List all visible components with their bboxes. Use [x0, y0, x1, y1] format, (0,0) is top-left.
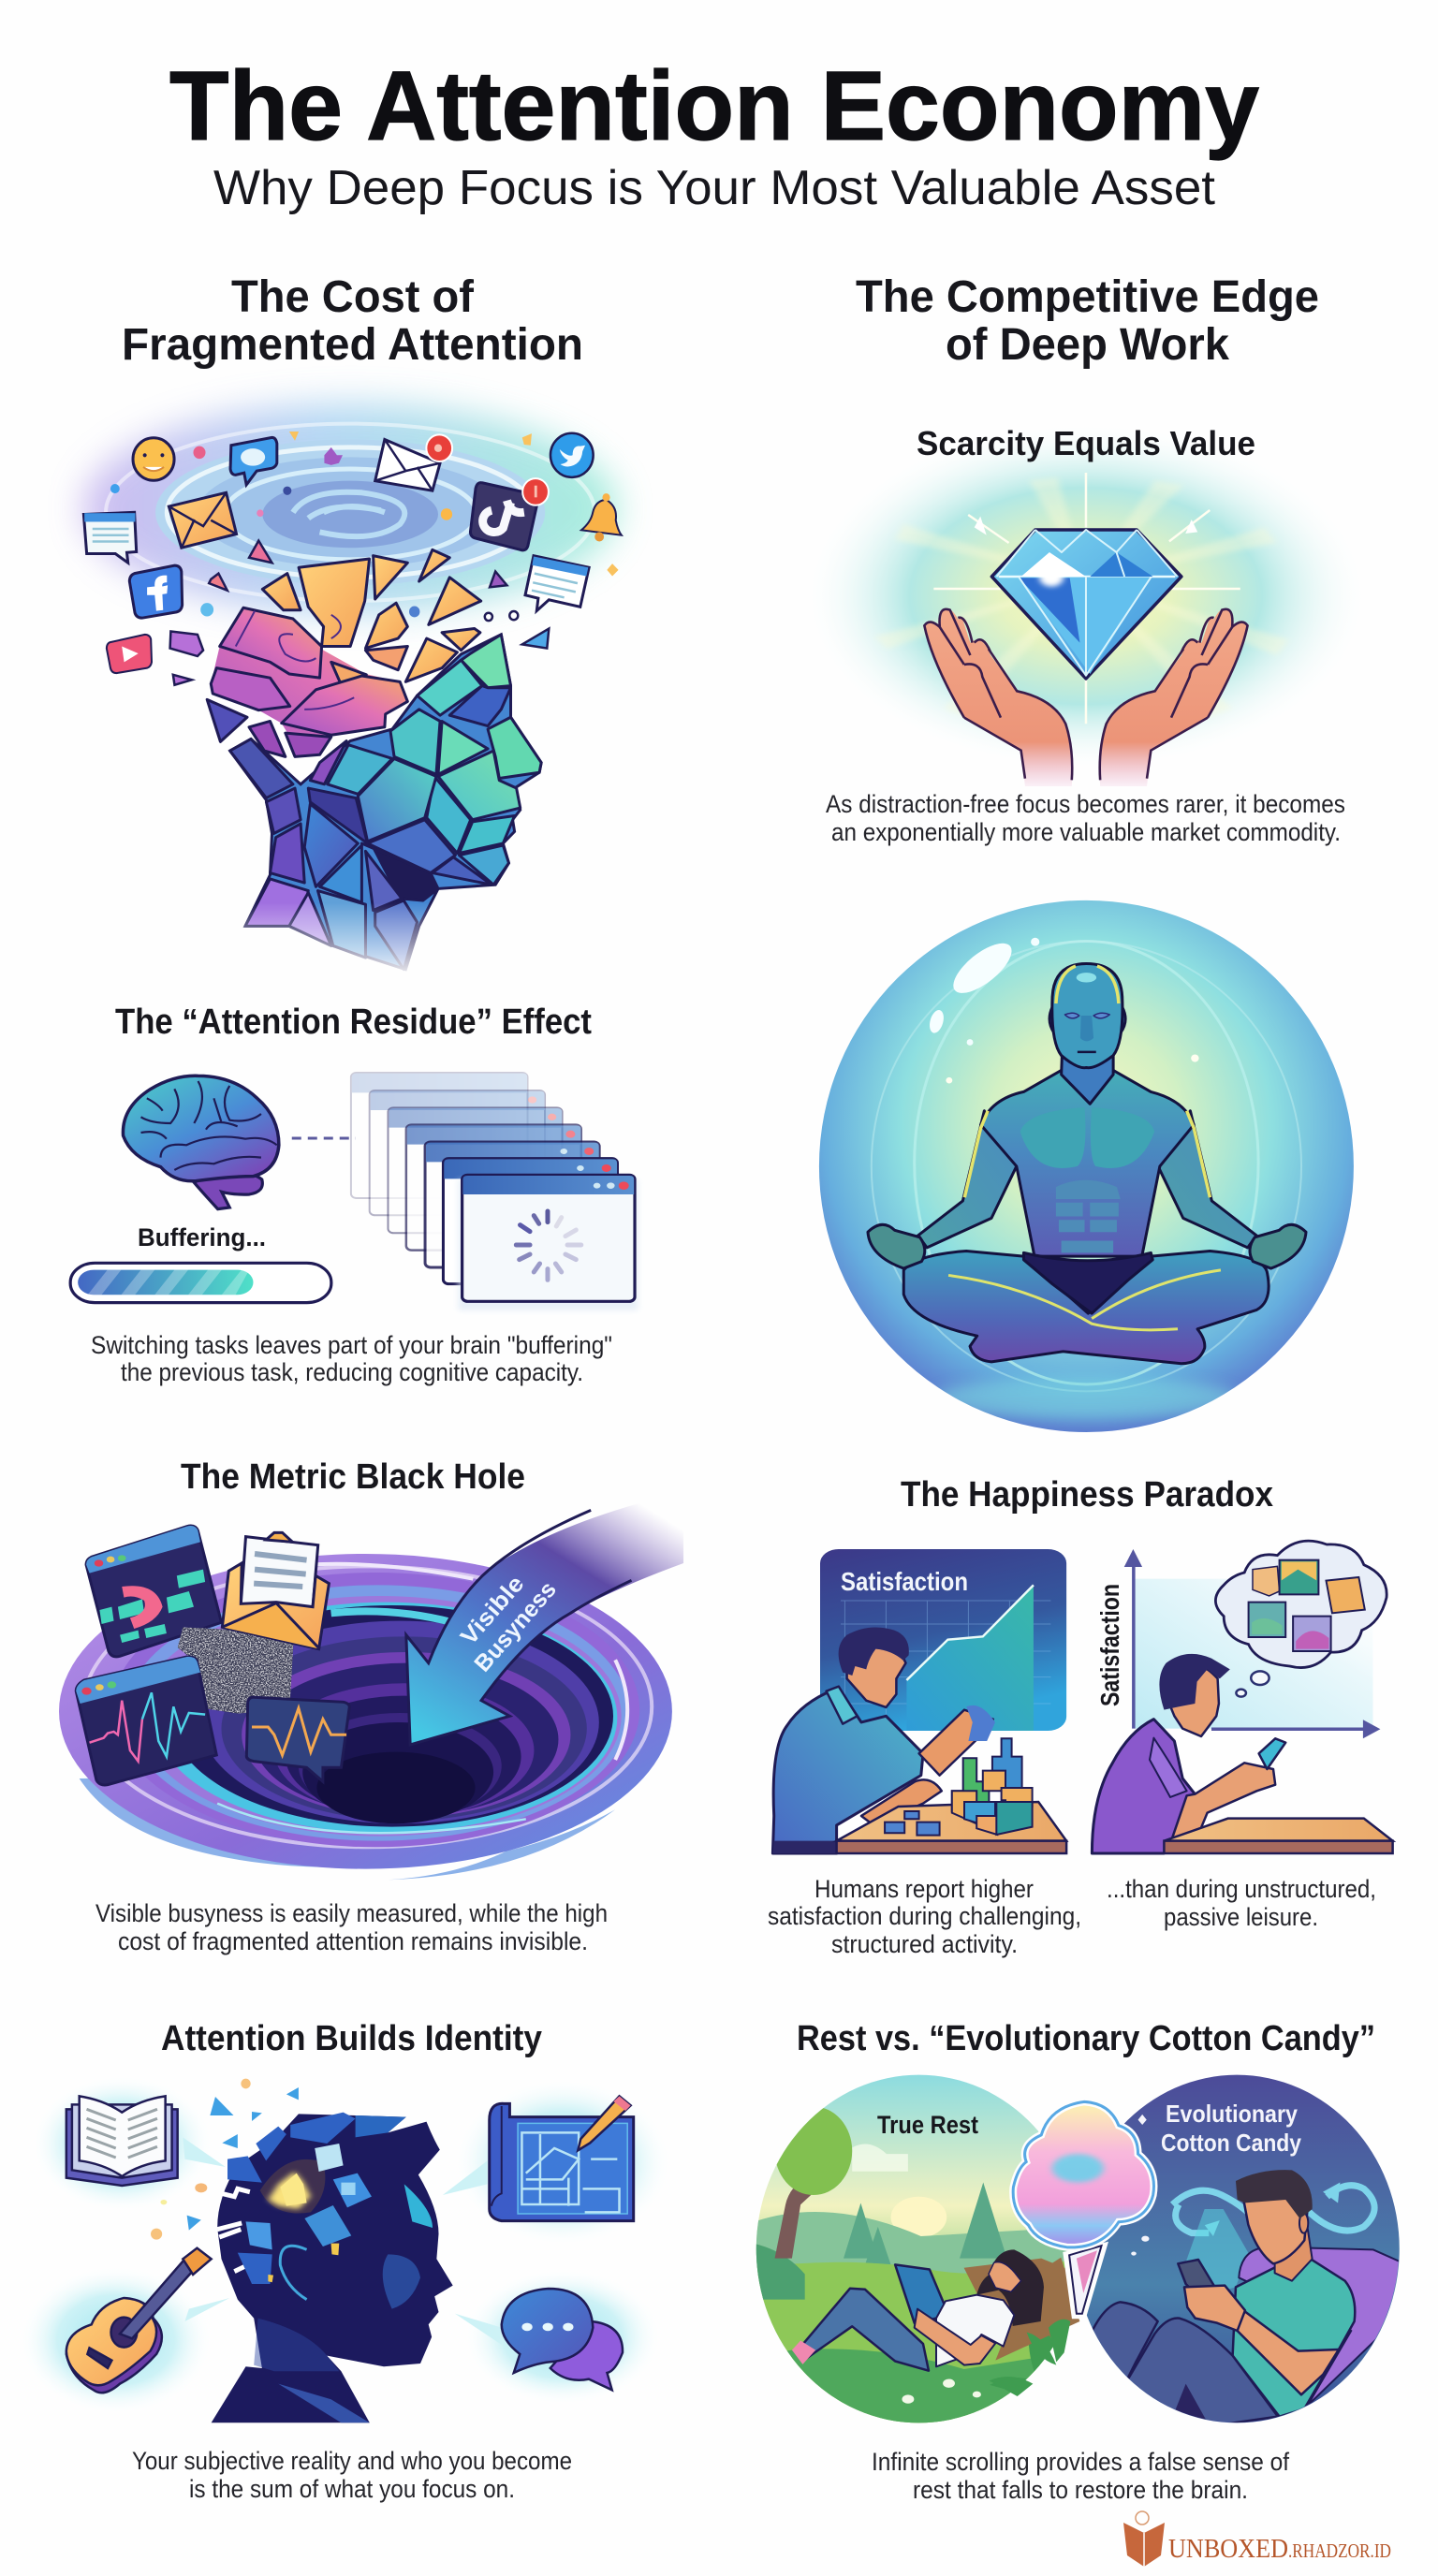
- icon: smiley: [133, 438, 174, 480]
- subtitle: Why Deep Focus is Your Most Valuable Asset: [213, 161, 1216, 215]
- text: black hole caption: [95, 1899, 608, 1955]
- chat waveform: [246, 1697, 349, 1781]
- label: chart satisfaction: Satisfaction: [841, 1567, 968, 1596]
- panel: black hole illustration: [59, 1491, 683, 1880]
- icon: message window right: [525, 556, 589, 611]
- icon: social f badge: [129, 565, 183, 618]
- icon: message window left: [83, 512, 137, 563]
- brain shards: [207, 549, 481, 784]
- ears: [1049, 1007, 1125, 1033]
- heading: right column: [856, 272, 1319, 370]
- icon: bird badge: [550, 433, 594, 477]
- text: rest caption: [872, 2448, 1289, 2504]
- icon: white envelope with badge: [375, 434, 452, 490]
- vortex: [59, 1554, 672, 1880]
- watermark logo: UNBOXED: [1168, 2535, 1288, 2564]
- table and blocks: [837, 1738, 1066, 1853]
- label: evolutionary cotton candy: Evolutionary: [1166, 2100, 1298, 2128]
- legs: [903, 1251, 1269, 1364]
- text: structured caption: [768, 1875, 1081, 1958]
- panel: identity illustration: [19, 2075, 672, 2422]
- scene: true rest: [749, 2071, 1089, 2426]
- icon: guitar: [66, 2248, 212, 2393]
- text: structured caption: satisfaction during challenging,: [768, 1902, 1081, 1930]
- text: black hole caption: Visible busyness is easily measured, while the high: [95, 1899, 608, 1927]
- heading: right column: The Competitive Edge: [856, 272, 1319, 322]
- text: structured caption: structured activity.: [831, 1930, 1018, 1958]
- neck: [1062, 1028, 1113, 1104]
- icon: left hand: [924, 609, 1072, 786]
- torso: [981, 1069, 1194, 1256]
- panel: fragmented head illustration: [83, 404, 622, 981]
- label: axis satisfaction: Satisfaction: [1095, 1584, 1124, 1706]
- icon: brain: [123, 1076, 279, 1209]
- label: visible busyness: Visible: [456, 1571, 529, 1650]
- heading: metric black hole: The Metric Black Hole: [181, 1457, 525, 1497]
- progress bar: [70, 1263, 331, 1303]
- heading: left column: The Cost of: [231, 272, 475, 322]
- panel: diamond illustration: [801, 421, 1371, 786]
- text: rest caption: rest that falls to restore the brain.: [913, 2476, 1248, 2504]
- dashed connector: [292, 1136, 356, 1139]
- icon: open book: [66, 2096, 178, 2186]
- hands: [868, 1224, 925, 1268]
- geometric face: [230, 635, 541, 970]
- satisfaction chart panel: [820, 1549, 1066, 1731]
- brain backing: [211, 607, 407, 754]
- icon: open envelope: [222, 1532, 329, 1649]
- icon: right hand: [1100, 609, 1248, 786]
- text: structured caption: Humans report higher: [814, 1875, 1034, 1903]
- heading: attention residue: The “Attention Residue” Effect: [115, 1003, 592, 1042]
- table right: [1164, 1819, 1393, 1853]
- head silhouette backing: [230, 635, 541, 970]
- glows: [19, 2075, 672, 2415]
- panel: attention residue illustration: [70, 1073, 638, 1310]
- right arm: [1158, 1111, 1256, 1248]
- man with phone and cushion: [1086, 2170, 1401, 2427]
- text: rest caption: Infinite scrolling provides a false sense of: [872, 2448, 1289, 2476]
- text: passive caption: passive leisure.: [1164, 1903, 1318, 1931]
- text: scarcity caption: [826, 790, 1345, 846]
- label: evolutionary cotton candy: Cotton Candy: [1161, 2129, 1301, 2157]
- label: visible busyness: Busyness: [469, 1576, 562, 1677]
- icon: chat bubble: [230, 437, 277, 485]
- stacked windows: [351, 1073, 638, 1310]
- watermark logo: [1123, 2511, 1391, 2567]
- text: identity caption: Your subjective reality and who you become: [132, 2447, 572, 2475]
- icon: cotton candy: [1013, 2101, 1153, 2317]
- man building blocks: [772, 1627, 995, 1853]
- heading: attention builds identity: Attention Builds Identity: [161, 2019, 542, 2058]
- icon: blueprint and pencil: [490, 2096, 634, 2221]
- heading: scarcity equals value: Scarcity Equals Value: [917, 424, 1255, 462]
- icon: bell: [581, 493, 622, 542]
- face: [1052, 964, 1123, 1068]
- heading: left column: Fragmented Attention: [122, 320, 583, 370]
- scene: evolutionary cotton candy: [1074, 2071, 1404, 2426]
- label: visible busyness: [448, 1558, 562, 1677]
- muscles: [1020, 1107, 1154, 1168]
- text: identity caption: [132, 2447, 572, 2503]
- icon: chat bubbles: [502, 2289, 623, 2390]
- watermark logo: .RHADZOR.ID: [1288, 2539, 1391, 2562]
- text: scarcity caption: an exponentially more valuable market commodity.: [831, 818, 1341, 846]
- heading: happiness paradox: The Happiness Paradox: [901, 1475, 1273, 1515]
- bubble: [819, 900, 1354, 1432]
- title: The Attention Economy: [169, 51, 1259, 161]
- sparkles: [1131, 2115, 1150, 2256]
- shards and light: [151, 2079, 372, 2284]
- thought cloud: [1215, 1541, 1387, 1697]
- text: scarcity caption: As distraction-free focus becomes rarer, it becomes: [826, 790, 1345, 818]
- text: attention residue caption: Switching tasks leaves part of your brain "buffering": [91, 1331, 612, 1359]
- card: dashboard: [86, 1526, 221, 1657]
- loading spinner: [516, 1211, 581, 1280]
- text: attention residue caption: the previous task, reducing cognitive capacity.: [121, 1358, 583, 1386]
- woman legs and book: [792, 2264, 949, 2371]
- floating fragments: [170, 541, 549, 685]
- left arm: [918, 1111, 1017, 1248]
- text: black hole caption: cost of fragmented attention remains invisible.: [118, 1927, 588, 1955]
- panel: rest vs cotton candy illustration: [749, 2071, 1404, 2427]
- arrow: visible busyness: [406, 1491, 683, 1745]
- icon: music app: [470, 478, 549, 550]
- man with phone: [1092, 1654, 1285, 1853]
- heading: rest vs cotton candy: Rest vs. “Evolutionary Cotton Candy”: [797, 2019, 1375, 2058]
- text: attention residue caption: [91, 1331, 612, 1386]
- text: identity caption: is the sum of what you focus on.: [189, 2475, 515, 2503]
- heading: left column: [122, 272, 583, 370]
- panel: happiness paradox illustration: [772, 1541, 1393, 1853]
- label: true rest: True Rest: [877, 2111, 978, 2139]
- text: passive caption: [1107, 1875, 1376, 1931]
- panel: meditating figure in bubble: [819, 900, 1354, 1432]
- icon: play badge: [107, 635, 152, 673]
- woman upper body: [915, 2249, 1079, 2396]
- card: noise: [178, 1627, 294, 1714]
- figure: [868, 964, 1306, 1364]
- icon: diamond: [991, 530, 1181, 679]
- text: passive caption: ...than during unstructured,: [1107, 1875, 1376, 1903]
- label: buffering: Buffering...: [138, 1223, 266, 1251]
- swirl of distraction: [83, 404, 618, 613]
- head silhouette: [212, 2114, 453, 2422]
- icon: orange envelope: [169, 492, 237, 548]
- heading: right column: of Deep Work: [946, 320, 1229, 370]
- glow and axes: [1124, 1549, 1380, 1738]
- radiant glow: [801, 421, 1371, 770]
- card: waveform: [76, 1657, 216, 1785]
- label: evolutionary cotton candy: [1161, 2100, 1301, 2157]
